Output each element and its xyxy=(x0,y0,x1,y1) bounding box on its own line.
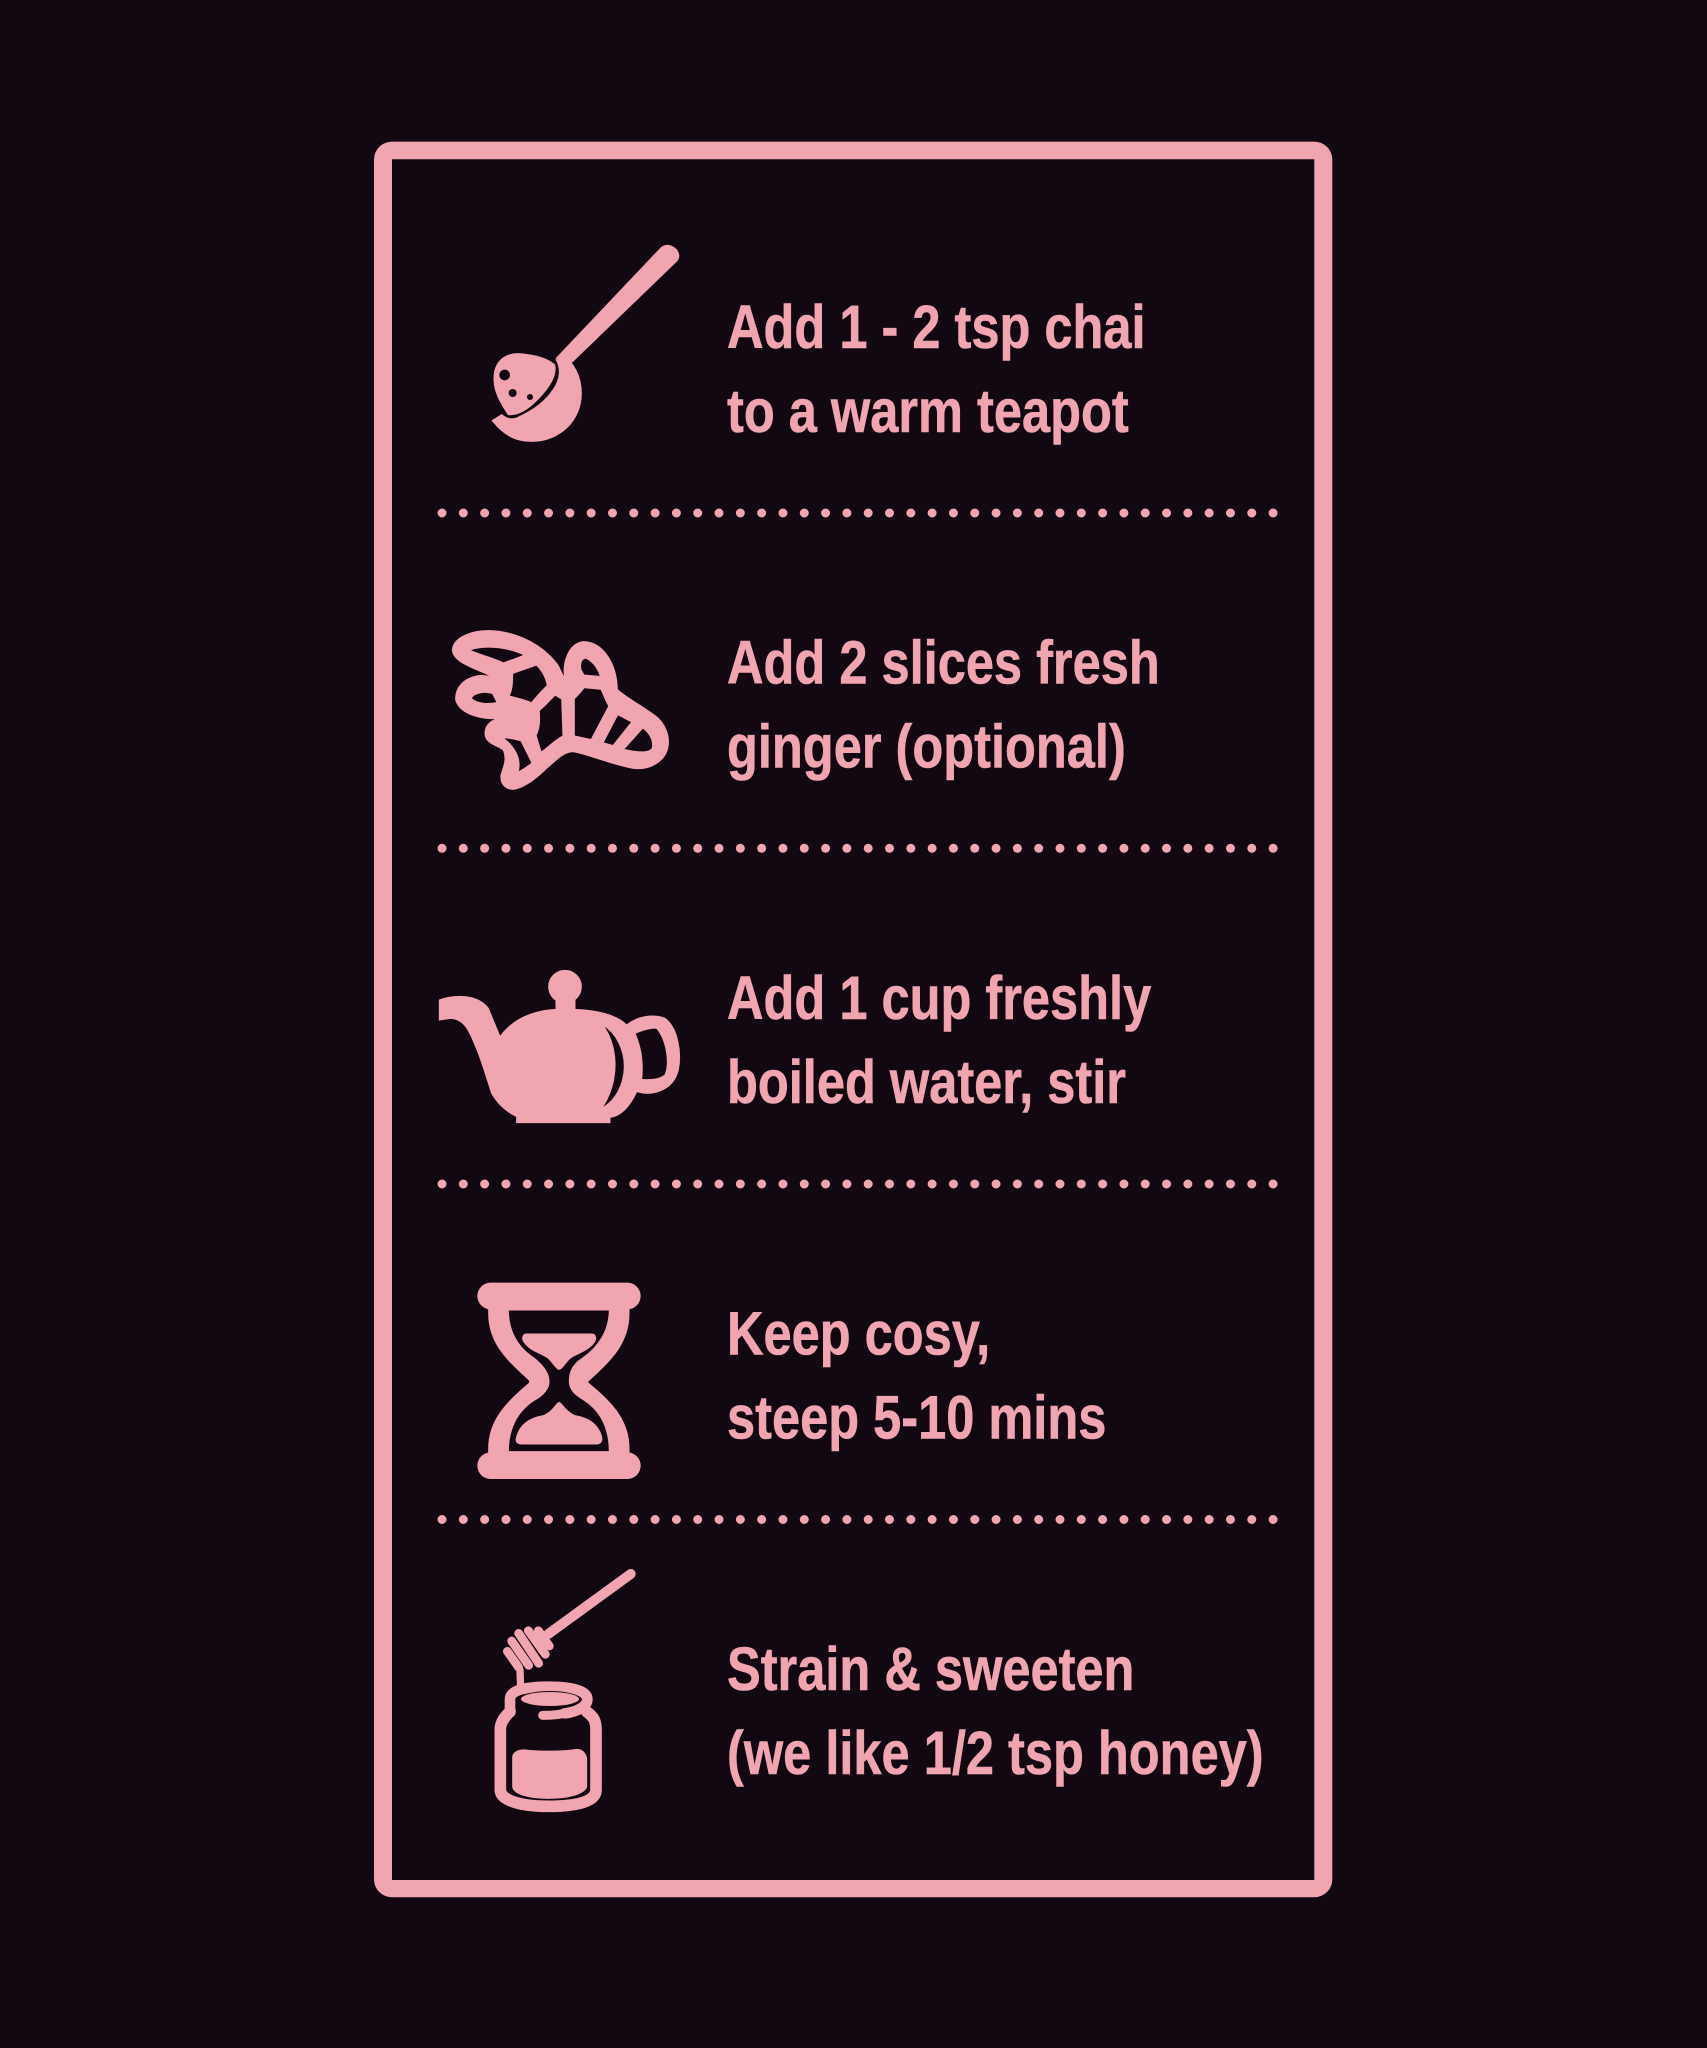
icon: hourglass xyxy=(477,1283,641,1479)
text: step 3 instruction: boiled water, stir xyxy=(727,1047,1126,1116)
icon: teapot xyxy=(439,970,680,1123)
step 1 xyxy=(493,245,1146,445)
step 5 xyxy=(500,1574,1264,1806)
text: step 4 instruction: steep 5-10 mins xyxy=(727,1383,1106,1452)
text: step 5 instruction: (we like 1/2 tsp honey) xyxy=(727,1718,1264,1787)
text: step 2 instruction: Add 2 slices fresh xyxy=(727,628,1160,697)
text: step 1 instruction: Add 1 - 2 tsp chai xyxy=(727,292,1146,361)
text: step 2 instruction: ginger (optional) xyxy=(727,712,1126,781)
icon: spoon with chai xyxy=(493,245,679,441)
step 2 xyxy=(452,628,1160,789)
text: step 5 instruction: Strain & sweeten xyxy=(727,1634,1134,1703)
step 4 xyxy=(477,1283,1106,1479)
step 3 xyxy=(439,963,1151,1123)
text: step 4 instruction: Keep cosy, xyxy=(727,1299,990,1368)
text: step 3 instruction: Add 1 cup freshly xyxy=(727,963,1151,1032)
text: step 1 instruction: to a warm teapot xyxy=(727,376,1129,445)
icon: honey jar and dipper xyxy=(500,1574,631,1806)
panel: instruction frame xyxy=(374,142,1332,1897)
icon: ginger root xyxy=(452,631,668,789)
